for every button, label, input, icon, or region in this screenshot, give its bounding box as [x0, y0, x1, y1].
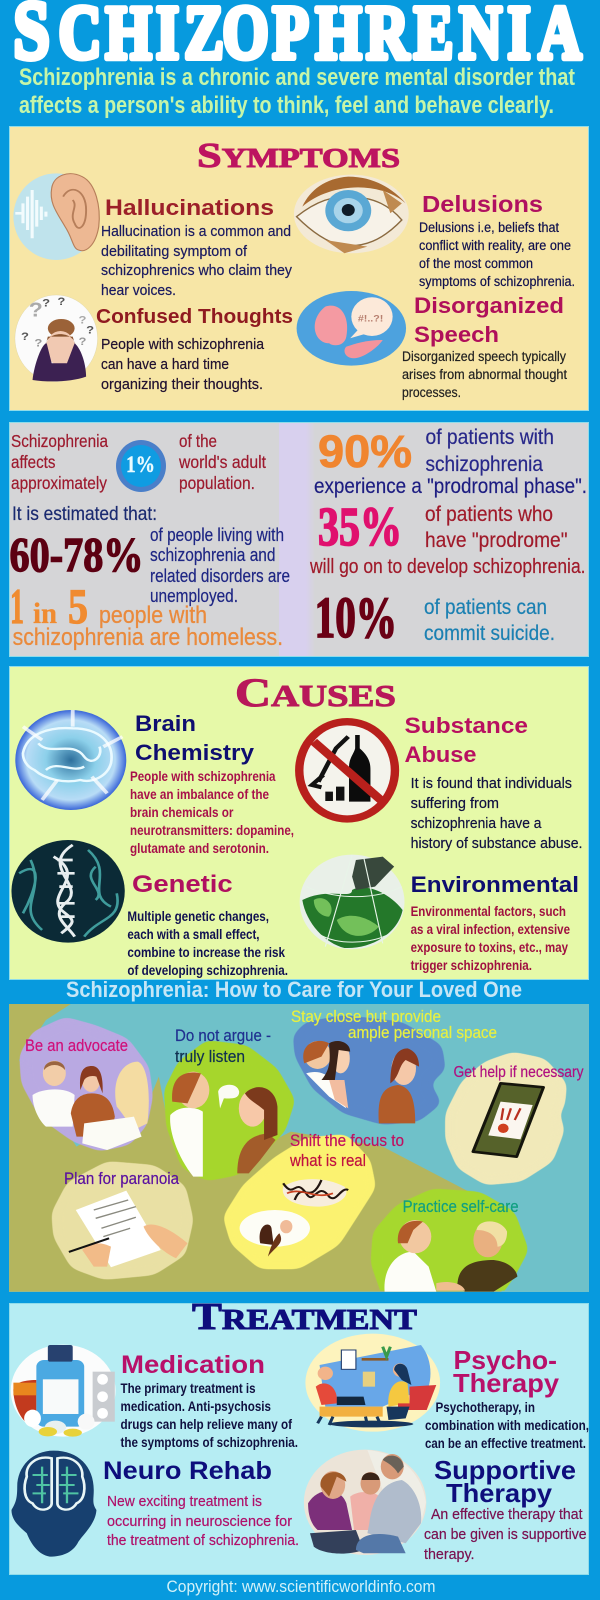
block: supportive therapy [424, 1455, 587, 1563]
block: environmental: trigger schizophrenia. [411, 958, 532, 973]
stat: unemployed: 60-78% [10, 527, 144, 582]
block: delusions: conflict with reality, are one [419, 238, 571, 253]
block: medication: drugs can help relieve many of [120, 1417, 292, 1432]
block: neuro rehab: Neuro Rehab [103, 1457, 272, 1485]
block: psychotherapy: Therapy [453, 1368, 560, 1398]
stat: ninety percent: schizophrenia [426, 452, 543, 476]
block: supportive therapy: therapy. [424, 1547, 474, 1563]
icon: speech bubbles: #!..?! [358, 314, 383, 324]
block: hallucinations: Hallucinations [105, 195, 274, 220]
block: substance abuse [404, 713, 582, 852]
block: genetic: Genetic [132, 871, 233, 898]
heading: how to care: Schizophrenia: How to Care for Your Loved One [66, 977, 522, 1002]
stat: thirty-five percent: have "prodrome" [425, 528, 568, 552]
stat: unemployed [10, 503, 290, 606]
tip: self-care [370, 1188, 528, 1292]
intro text [19, 64, 575, 119]
stat: ten percent [315, 585, 555, 650]
block: confused thoughts: organizing their thoughts. [101, 377, 263, 393]
block: medication: the symptoms of schizophrenia. [120, 1435, 298, 1450]
icon: confused woman: ? [78, 335, 86, 348]
stat: ten percent: 10% [315, 585, 397, 650]
stat: ten percent: commit suicide. [424, 621, 555, 645]
icon: confused woman: ? [21, 330, 29, 343]
stat: unemployed: It is estimated that: [12, 503, 157, 525]
heading: treatment: TREATMENT [192, 1296, 417, 1338]
block: hallucinations [101, 195, 293, 299]
tip: personal space [291, 1008, 497, 1125]
tip: personal space: Stay close but provide [291, 1008, 441, 1026]
block: supportive therapy: Supportive [434, 1455, 576, 1485]
block: hallucinations: hear voices. [101, 283, 176, 299]
stat: ninety percent: 90% [318, 426, 412, 477]
icon: globe [300, 855, 405, 949]
icon: confused woman: ? [86, 323, 94, 336]
stat: one percent: Schizophrenia [11, 431, 108, 451]
heading: causes: CAUSES [235, 670, 396, 715]
icon: confused woman: ? [42, 296, 50, 309]
icon: ear [13, 173, 99, 260]
block: substance abuse: suffering from [411, 796, 499, 812]
stat: one percent: 1% [126, 452, 155, 477]
panel: caring tips [9, 1004, 589, 1303]
block: medication [120, 1351, 298, 1450]
block: genetic: each with a small effect, [127, 927, 260, 942]
block: neuro rehab: occurring in neuroscience for [107, 1514, 292, 1530]
block: delusions: of the most common [419, 256, 533, 271]
tip: self-care: Practice self-care [403, 1198, 519, 1216]
stat: one percent: of the [179, 431, 217, 451]
block: delusions: Delusions [422, 191, 543, 217]
stat: ninety percent: of patients with [426, 425, 554, 449]
tip: plan for paranoia: Plan for paranoia [64, 1170, 180, 1188]
block: genetic: Multiple genetic changes, [127, 909, 269, 924]
stat: homeless: schizophrenia are homeless. [13, 624, 283, 651]
stat: one percent: affects [11, 452, 56, 472]
block: brain chemistry [130, 711, 294, 856]
block: substance abuse: Abuse [404, 742, 476, 767]
block: brain chemistry: People with schizophrenia [130, 769, 276, 784]
block: substance abuse: history of substance abuse. [411, 836, 582, 852]
stat: thirty-five percent: of patients who [425, 502, 553, 526]
block: substance abuse: It is found that individuals [411, 776, 572, 792]
block: brain chemistry: brain chemicals or [130, 805, 234, 820]
block: disorganized speech: Disorganized speech typically [402, 349, 566, 364]
stat: one percent: world's adult [178, 452, 266, 472]
stat: thirty-five percent [309, 496, 586, 578]
icon: confused woman: ? [57, 295, 65, 308]
block: environmental [411, 872, 579, 973]
icon: dna [11, 840, 125, 943]
block: genetic: combine to increase the risk [127, 945, 285, 960]
icon: eye [294, 175, 409, 253]
block: neuro rehab: New exciting treatment is [107, 1494, 262, 1510]
stat: ninety percent [314, 425, 587, 498]
stat: one percent [11, 431, 266, 493]
stat: homeless: people with [99, 602, 207, 629]
panel: causes [10, 666, 588, 980]
tip: do not argue: Do not argue - [175, 1027, 271, 1045]
block: delusions [419, 191, 575, 289]
stat: unemployed: related disorders are [150, 566, 290, 586]
block: delusions: symptoms of schizophrenia. [419, 274, 575, 289]
block: psychotherapy [425, 1345, 589, 1451]
stat: one percent: approximately [11, 473, 107, 493]
block: neuro rehab [103, 1457, 299, 1549]
block: brain chemistry: Chemistry [135, 740, 255, 765]
tip: personal space: ample personal space [348, 1024, 497, 1042]
tip: shift the focus: what is real [289, 1152, 366, 1170]
block: supportive therapy: can be given is supportive [424, 1527, 587, 1543]
icon: no substance abuse [299, 722, 395, 819]
panel: symptoms [10, 126, 588, 410]
tip: plan for paranoia [51, 1161, 194, 1280]
block: genetic: of developing schizophrenia. [127, 963, 288, 978]
stat: homeless: in [33, 597, 57, 630]
block: brain chemistry: glutamate and serotonin. [130, 841, 269, 856]
block: confused thoughts: Confused Thoughts [96, 306, 293, 328]
block: environmental: as a viral infection, extensive [411, 922, 570, 937]
block: medication: The primary treatment is [120, 1381, 256, 1396]
block: confused thoughts: can have a hard time [101, 357, 229, 373]
background olive region [9, 1004, 524, 1292]
block: disorganized speech: Disorganized [414, 293, 564, 318]
tip: be an advocate: Be an advocate [25, 1037, 128, 1055]
icon: neuro head [11, 1451, 96, 1557]
block: environmental: Environmental [411, 872, 579, 897]
tip: be an advocate [19, 1017, 153, 1152]
icon: confused woman: ? [29, 299, 43, 321]
tip: do not argue [164, 1027, 295, 1181]
block: hallucinations: debilitating symptom of [101, 244, 248, 260]
panel: statistics [10, 422, 588, 656]
block: hallucinations: Hallucination is a common and [101, 224, 291, 240]
block: supportive therapy: An effective therapy that [431, 1507, 582, 1523]
block: brain chemistry: Brain [135, 711, 196, 736]
block: environmental: Environmental factors, such [411, 904, 566, 919]
tip: shift the focus [223, 1132, 404, 1269]
icon: brain [15, 710, 126, 810]
stat: ten percent: of patients can [424, 595, 547, 619]
block: medication: medication. Anti-psychosis [120, 1399, 271, 1414]
panel: treatment [10, 1296, 589, 1574]
block: disorganized speech: processes. [402, 385, 461, 400]
stat: unemployed: of people living with [150, 525, 284, 545]
block: disorganized speech: Speech [414, 322, 499, 347]
block: psychotherapy: Psychotherapy, in [436, 1400, 535, 1415]
icon: confused woman [15, 295, 98, 382]
tip: get help [445, 1052, 584, 1185]
block: brain chemistry: have an imbalance of the [130, 787, 269, 802]
icon: confused woman: ? [78, 313, 86, 326]
block: substance abuse: schizophrenia have a [411, 816, 542, 832]
stat: homeless [10, 578, 283, 651]
stat: thirty-five percent: 35% [318, 496, 402, 557]
copyright: Copyright: www.scientificworldinfo.com [166, 1577, 436, 1596]
block: disorganized speech: arises from abnormal thought [402, 367, 567, 382]
block: disorganized speech [402, 293, 567, 400]
block: substance abuse: Substance [404, 713, 528, 738]
icon: supportive therapy photo [304, 1450, 426, 1555]
block: genetic [127, 871, 288, 978]
block: supportive therapy: Therapy [446, 1478, 553, 1508]
block: confused thoughts [96, 306, 293, 393]
block: neuro rehab: the treatment of schizophrenia. [107, 1533, 299, 1549]
tip: shift the focus: Shift the focus to [290, 1132, 404, 1150]
tip: get help: Get help if necessary [454, 1064, 584, 1081]
block: medication: Medication [121, 1351, 265, 1379]
block: environmental: exposure to toxins, etc., may [411, 940, 568, 955]
icon: psychotherapy [305, 1334, 440, 1432]
stat: unemployed: unemployed. [150, 586, 238, 606]
stat: homeless: 1 [10, 578, 24, 634]
tip: do not argue: truly listen [175, 1048, 245, 1066]
heading: symptoms: SYMPTOMS [197, 136, 400, 175]
stat: homeless: 5 [68, 578, 88, 634]
block: brain chemistry: neurotransmitters: dopamine, [130, 823, 294, 838]
block: hallucinations: schizophrenics who claim they [101, 263, 293, 279]
block: confused thoughts: People with schizophrenia [101, 337, 265, 353]
icon: speech bubbles [297, 291, 406, 366]
icon: medication [11, 1345, 116, 1437]
icon: confused woman: ? [34, 336, 42, 349]
block: delusions: Delusions i.e, beliefs that [419, 220, 559, 235]
stat: unemployed: schizophrenia and [150, 545, 276, 565]
stat: one percent: population. [179, 473, 255, 493]
block: psychotherapy: Psycho- [454, 1345, 557, 1375]
